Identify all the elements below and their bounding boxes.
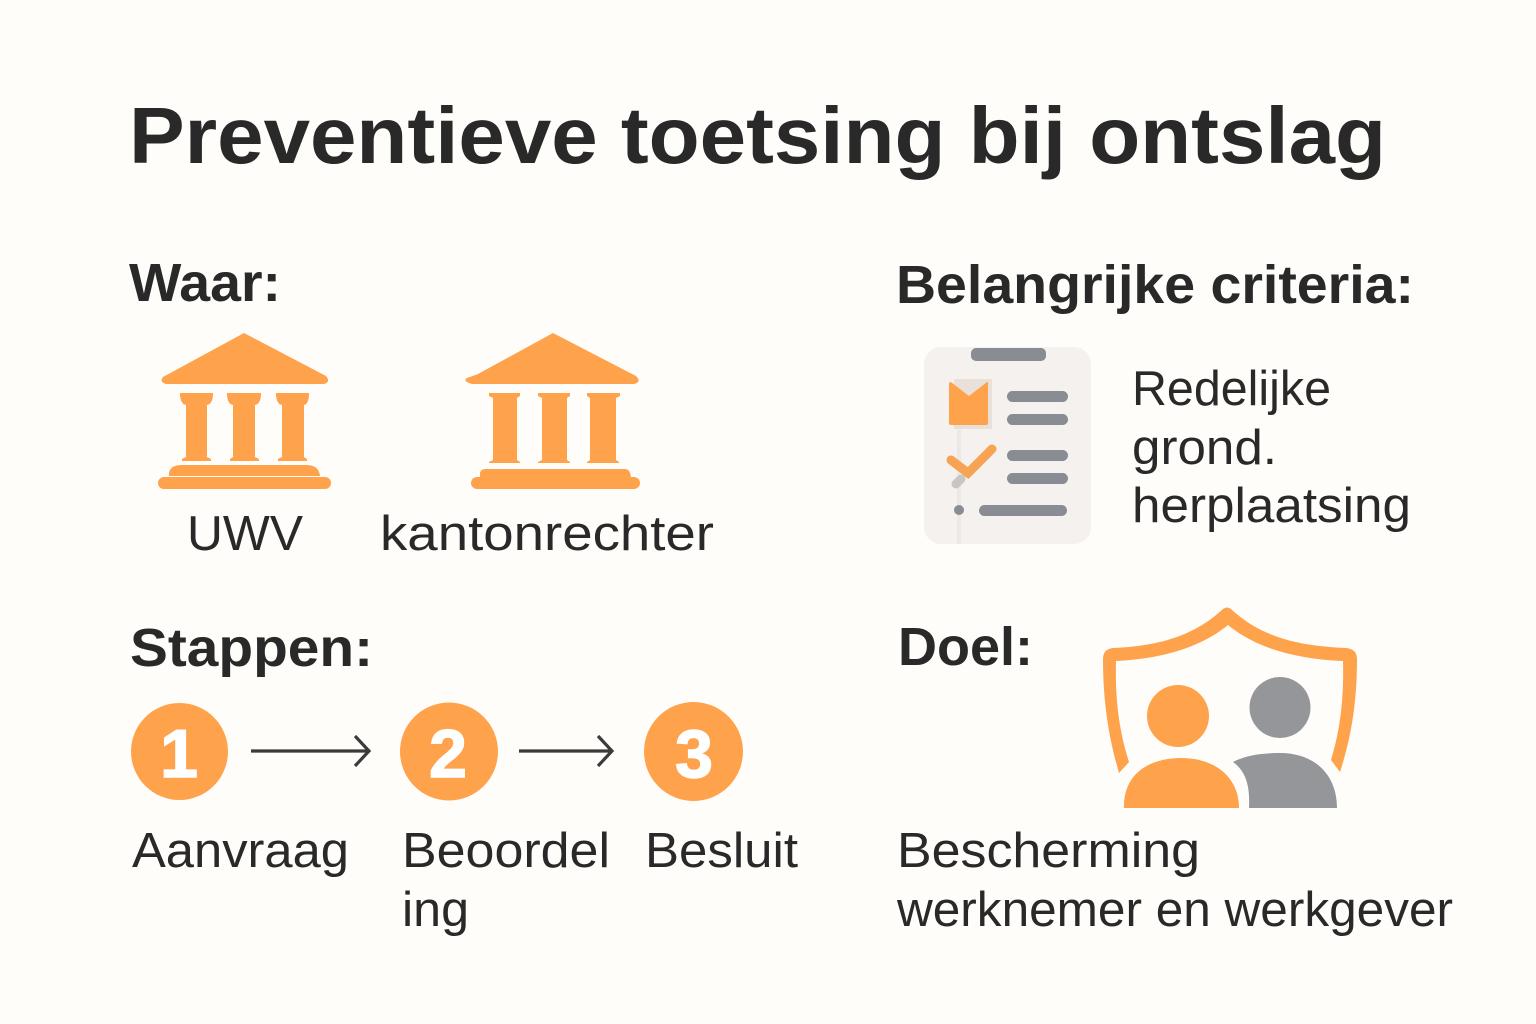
label: UWV: UWV — [187, 507, 303, 561]
step 1 badge: 1 — [160, 716, 198, 792]
arrow 1 to 2 — [251, 736, 369, 766]
icon: shield with two people — [1103, 608, 1357, 808]
heading: belangrijke criteria: Belangrijke criteria: — [896, 255, 1414, 315]
title: Preventieve toetsing bij ontslag — [129, 91, 1386, 180]
step 2 badge: 2 — [429, 716, 467, 792]
icon: UWV building — [158, 333, 331, 489]
label: kantonrechter: kantonrechter — [380, 507, 714, 561]
arrow 2 to 3 — [519, 736, 612, 766]
icon: clipboard checklist — [924, 347, 1091, 544]
text: doel description: Bescherming — [897, 824, 1200, 878]
step 3 badge: 3 — [675, 716, 713, 792]
text: criteria list — [1132, 362, 1411, 533]
text: criteria list: grond. — [1132, 421, 1277, 475]
label: aanvraag: Aanvraag — [132, 824, 349, 878]
label: beoordeling — [402, 824, 610, 937]
heading: stappen: Stappen: — [130, 618, 373, 678]
text: criteria list: herplaatsing — [1132, 479, 1411, 533]
panel: stappen — [130, 618, 798, 937]
step 2 badge — [400, 702, 498, 800]
text: doel description — [896, 824, 1453, 937]
text: doel description: werknemer en werkgever — [896, 883, 1453, 937]
panel: waar — [129, 253, 714, 561]
label: beoordeling: ing — [402, 883, 469, 937]
panel: belangrijke criteria — [896, 255, 1414, 544]
label: besluit: Besluit — [645, 824, 798, 878]
heading: doel: Doel: — [898, 617, 1033, 677]
panel: doel — [896, 608, 1453, 937]
label: beoordeling: Beoordel — [402, 824, 610, 878]
step 3 badge — [644, 702, 743, 801]
icon: kantonrechter building — [465, 333, 640, 489]
step 1 badge — [131, 703, 228, 800]
heading: waar: Waar: — [129, 253, 281, 313]
text: criteria list: Redelijke — [1132, 362, 1331, 416]
